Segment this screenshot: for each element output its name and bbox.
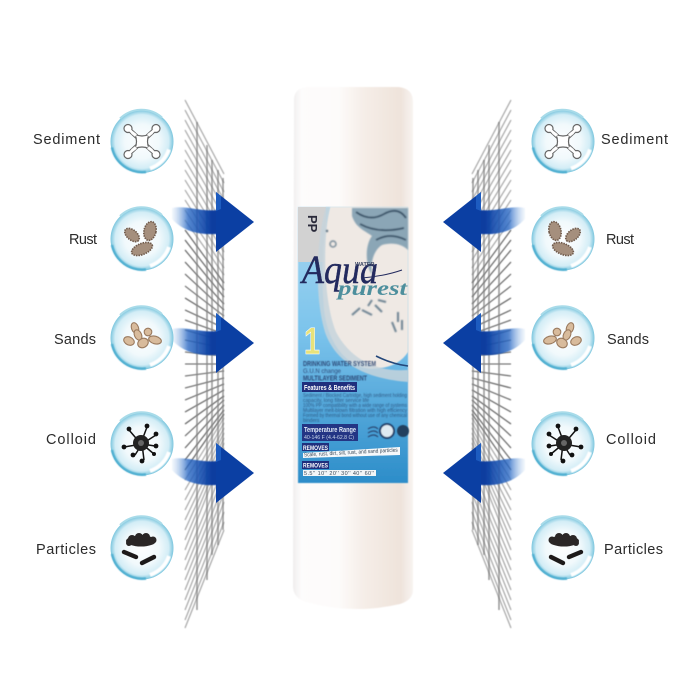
left item: Sediment: Sediment bbox=[33, 132, 100, 148]
right item: Rust: Rust bbox=[606, 232, 634, 248]
brand swoosh bbox=[362, 270, 402, 278]
features paragraph: Sediment / Blocked Cartridge, high sediment holding bbox=[303, 393, 407, 399]
number 1: 1 bbox=[304, 321, 320, 363]
removes heading one: REMOVES bbox=[303, 445, 329, 452]
right item: Colloid: Colloid bbox=[606, 432, 656, 448]
left item: Rust bbox=[69, 207, 174, 270]
label heading text bbox=[303, 359, 376, 382]
features paragraph: binders bbox=[303, 418, 320, 424]
features paragraph: capacity, long filter service life bbox=[303, 398, 369, 404]
left item: Colloid: Colloid bbox=[46, 432, 96, 448]
right item: Sediment: Sediment bbox=[601, 132, 668, 148]
water splash picture bbox=[326, 208, 408, 332]
features heading: Features & Benefits bbox=[304, 383, 355, 392]
left arrows pointing to the cartridge bbox=[172, 192, 254, 503]
label grey swoosh band bbox=[318, 207, 408, 382]
left item: Particles: Particles bbox=[36, 542, 96, 558]
right arrows pointing to the cartridge bbox=[443, 192, 525, 503]
left filter mesh bbox=[185, 100, 224, 628]
PP grade mark: PP bbox=[305, 215, 320, 233]
left item: Sands: Sands bbox=[54, 332, 96, 348]
right item: Colloid bbox=[532, 412, 656, 476]
features paragraph: Formed by thermal bond without use of any chemical bbox=[303, 413, 407, 419]
product label bbox=[298, 207, 409, 483]
filter cartridge bbox=[293, 87, 413, 609]
size strip: 5.5'' 10'' 20'' 30'' 40'' 60'' bbox=[304, 471, 374, 477]
right item: Rust bbox=[532, 207, 634, 270]
left item: Sands bbox=[54, 306, 174, 370]
left item: Rust: Rust bbox=[69, 232, 97, 248]
right item: Sands: Sands bbox=[607, 332, 649, 348]
temperature range box bbox=[302, 424, 358, 441]
label navy swoosh bbox=[376, 356, 408, 366]
right item: Particles: Particles bbox=[604, 542, 663, 558]
label heading text: MULTILAYER SEDIMENT bbox=[303, 374, 367, 382]
brand word WATER: WATER bbox=[355, 262, 374, 268]
removes heading two bbox=[302, 461, 329, 470]
removes heading one bbox=[302, 443, 329, 452]
removes text strip: Scale, rust, dirt, silt, rust, and sand particles bbox=[304, 448, 398, 458]
temperature range box: Temperature Range bbox=[304, 425, 356, 434]
label heading text: DRINKING WATER SYSTEM bbox=[303, 359, 376, 368]
brand name Aqua: Aqua bbox=[299, 247, 378, 292]
label white swoosh bbox=[322, 207, 408, 369]
features heading bbox=[302, 382, 357, 392]
right item: Sediment bbox=[532, 110, 668, 173]
temperature range box: 40-146 F (4.4-62.8 C) bbox=[304, 435, 354, 441]
features paragraph: 100% PP compatibility with a wide range of systems bbox=[303, 403, 407, 409]
certification icons bbox=[368, 424, 409, 438]
left item: Colloid bbox=[46, 412, 174, 476]
label heading text: G.U.N change bbox=[303, 369, 342, 375]
right item: Sands bbox=[532, 306, 649, 370]
removes heading two: REMOVES bbox=[303, 462, 329, 470]
left item: Sediment bbox=[33, 110, 174, 173]
right item: Particles bbox=[532, 516, 663, 580]
brand name purest: purest bbox=[335, 278, 409, 300]
features paragraph: Multilayer melt-blown filtration with high efficiency bbox=[303, 408, 407, 414]
label grey strip bbox=[298, 207, 326, 262]
left item: Particles bbox=[36, 516, 174, 580]
features paragraph bbox=[303, 393, 407, 424]
right filter mesh bbox=[472, 100, 511, 628]
